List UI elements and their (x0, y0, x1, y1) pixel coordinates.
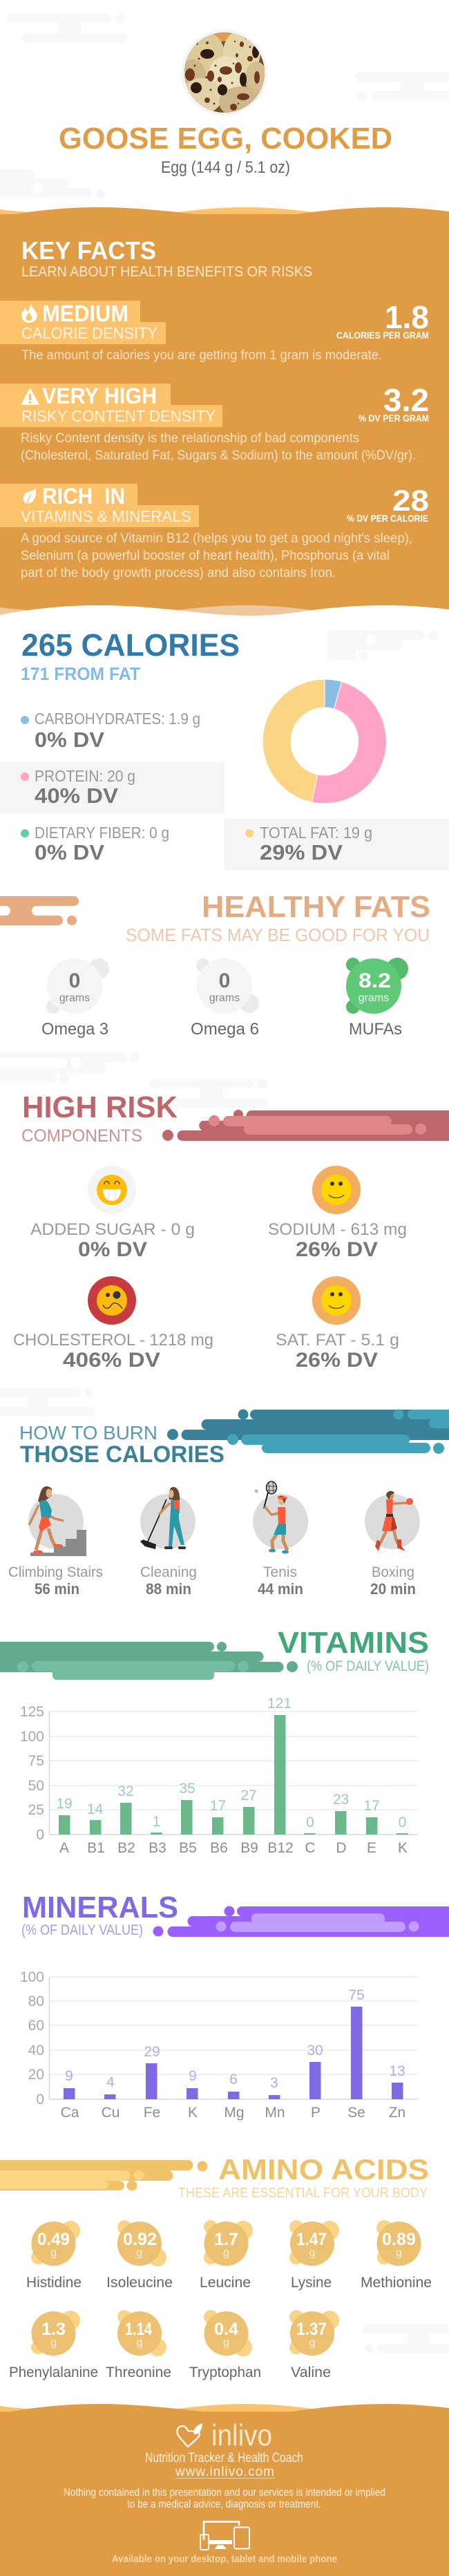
bar chart: minerals: 13 (389, 2063, 405, 2079)
heading: how to burn: HOW TO BURN (19, 1422, 157, 1443)
subheading: amino acids: THESE ARE ESSENTIAL FOR YOUR BODY (178, 2186, 428, 2201)
bar chart: vitamins: B2 (117, 1840, 135, 1856)
bar chart: minerals: 60 (28, 2018, 44, 2034)
icon: leaf (23, 489, 36, 504)
band: vitamins (0, 1642, 298, 1680)
activity: boxing (365, 1491, 420, 1598)
nutrient: carbohydrates: CARBOHYDRATES: 1.9 g (35, 710, 200, 728)
logo: inlivo: inlivo (211, 2418, 272, 2452)
amino acid: methionine: 0.89 (382, 2230, 416, 2249)
amino acid: isoleucine (106, 2220, 173, 2291)
bar chart: minerals: 80 (28, 1993, 44, 2009)
bar chart: minerals (20, 1969, 418, 2121)
card: risky content density: (Cholesterol, Saturated Fat, Sugars & Sodium) to the amount (%DV/gr). (21, 448, 416, 463)
amino acid: valine (289, 2310, 339, 2380)
amino acid: methionine (361, 2220, 432, 2291)
activity: cleaning: 88 min (146, 1580, 191, 1598)
bar chart: vitamins: 1 (153, 1814, 160, 1830)
bar chart: vitamins: 125 (20, 1704, 44, 1720)
badge: omega 3 (41, 958, 109, 1039)
card: calorie density: MEDIUM (42, 301, 128, 326)
icon: smiling face (312, 1166, 361, 1214)
card: calorie density: CALORIES PER GRAM (336, 330, 429, 341)
card: risky content density: 3.2 (383, 382, 429, 418)
heading: calories: 265 CALORIES (21, 627, 240, 663)
bar chart: vitamins: C (305, 1840, 316, 1856)
bar chart: vitamins: B12 (267, 1840, 294, 1856)
bar chart: vitamins: B1 (87, 1840, 105, 1856)
activity: tennis (253, 1481, 308, 1598)
amino acid: valine: Valine (291, 2365, 331, 2380)
subheading: healthy fats: SOME FATS MAY BE GOOD FOR YOU (126, 926, 430, 945)
bar chart: vitamins: 19 (56, 1796, 73, 1812)
risk item: sodium: 26% DV (296, 1238, 378, 1261)
risk item: sodium (268, 1166, 407, 1261)
bar chart: minerals: 0 (36, 2092, 44, 2108)
bar chart: vitamins: E (367, 1840, 376, 1856)
risk item: cholesterol: 406% DV (63, 1349, 160, 1372)
nutrient: dietary fiber: DIETARY FIBER: 0 g (35, 824, 169, 842)
risk item: cholesterol: CHOLESTEROL - 1218 mg (13, 1331, 213, 1349)
card: rich in vitamins and minerals: 28 (392, 484, 429, 518)
bar chart: minerals: K (188, 2105, 198, 2121)
amino acid: histidine: Histidine (26, 2275, 82, 2291)
bar chart: minerals: 3 (270, 2075, 278, 2091)
disclaimer (64, 2487, 385, 2510)
activity: boxing: Boxing (372, 1564, 414, 1580)
bar chart: vitamins: 50 (28, 1778, 44, 1794)
amino acid: methionine: g (396, 2247, 402, 2259)
badge: omega 6: 0 (219, 969, 230, 992)
card: rich in vitamins and minerals: A good source of Vitamin B12 (helps you to get a good night's sleep), (21, 531, 412, 546)
activity: climbing stairs (8, 1486, 103, 1598)
badge: MUFAs: grams (359, 992, 389, 1004)
card: risky content density: VERY HIGH (42, 383, 157, 408)
badge: omega 6: grams (209, 992, 240, 1004)
subheading: components: COMPONENTS (21, 1126, 142, 1146)
activity: tennis: 44 min (258, 1580, 303, 1598)
card: rich in vitamins and minerals (0, 484, 429, 580)
amino acid: phenylalanine: g (50, 2337, 57, 2349)
amino acid: isoleucine: 0.92 (123, 2230, 157, 2249)
card: risky content density: RISKY CONTENT DENSITY (21, 407, 216, 425)
amino acid: tryptophan: Tryptophan (189, 2365, 261, 2380)
band: amino acids (0, 2160, 207, 2190)
heading: vitamins: VITAMINS (278, 1626, 429, 1660)
risk item: saturated fat: SAT. FAT - 5.1 g (276, 1331, 399, 1349)
amino acid: histidine: 0.49 (37, 2230, 70, 2249)
badge: omega 6 (191, 958, 259, 1039)
card: rich in vitamins and minerals: part of the body growth process) and also contains Iron. (21, 566, 336, 580)
bar chart: vitamins: 27 (240, 1788, 257, 1803)
bar chart: vitamins: 0 (399, 1815, 406, 1830)
bar chart: minerals: 20 (28, 2067, 44, 2083)
risk item: saturated fat (276, 1276, 399, 1372)
amino acid: leucine: g (223, 2247, 229, 2259)
icon: stairs climber (29, 1486, 86, 1556)
amino acid: threonine: Threonine (106, 2365, 171, 2380)
nutrient: dietary fiber (21, 824, 169, 864)
activity: climbing stairs: 56 min (35, 1580, 79, 1598)
icon: devices (200, 2522, 249, 2550)
bar chart: minerals: 29 (144, 2044, 160, 2060)
nutrient: total fat (224, 819, 449, 870)
bar chart: vitamins: 35 (179, 1781, 195, 1797)
amino acid: tryptophan: g (223, 2337, 229, 2349)
heading: healthy fats: HEALTHY FATS (202, 890, 430, 924)
heading: amino acids: AMINO ACIDS (218, 2153, 429, 2186)
icon: grinning face (88, 1166, 136, 1214)
band: high risk (162, 1110, 449, 1141)
bar chart: minerals: 9 (189, 2068, 197, 2084)
card: calorie density (0, 299, 429, 363)
card: rich in vitamins and minerals: VITAMINS & MINERALS (21, 507, 191, 525)
bar chart: vitamins: B6 (210, 1840, 228, 1856)
amino acid: leucine (200, 2220, 253, 2291)
bar chart: minerals: 30 (307, 2043, 323, 2058)
amino acid: leucine: 1.7 (214, 2230, 238, 2249)
amino acid: lysine: g (309, 2247, 315, 2259)
website link: www.inlivo.com (175, 2465, 274, 2479)
amino acid: phenylalanine: Phenylalanine (9, 2365, 98, 2380)
panel: how to burn those calories (8, 1410, 449, 1598)
amino acid: valine: 1.37 (296, 2320, 327, 2339)
bar chart: vitamins: 0 (36, 1827, 44, 1843)
bar chart: minerals: P (311, 2105, 321, 2121)
card: calorie density: 1.8 (385, 299, 429, 335)
heading: minerals: MINERALS (22, 1891, 178, 1924)
card: rich in vitamins and minerals: RICH IN (42, 484, 125, 509)
icon: worried face (88, 1276, 136, 1325)
amino acid: isoleucine: g (137, 2247, 142, 2259)
card: calorie density: CALORIE DENSITY (21, 324, 157, 342)
card: risky content density (0, 382, 429, 463)
activity: boxing: 20 min (370, 1580, 416, 1598)
bar chart: vitamins: 0 (306, 1815, 314, 1830)
bar chart: minerals: 75 (348, 1987, 365, 2003)
panel: high risk components (13, 1090, 449, 1372)
panel: calories (0, 627, 449, 870)
bar chart: vitamins: K (398, 1840, 408, 1856)
bar chart: minerals: 40 (28, 2043, 44, 2058)
logo: inlivo (178, 2418, 272, 2452)
bar chart: vitamins: A (59, 1840, 69, 1856)
band: healthy fats (0, 896, 79, 925)
risk item: cholesterol (13, 1276, 213, 1372)
amino acid: methionine: Methionine (361, 2275, 432, 2291)
bar chart: minerals: Se (347, 2105, 365, 2121)
badge: omega 3: Omega 3 (41, 1020, 108, 1039)
card: rich in vitamins and minerals: Selenium (a powerful booster of heart health), Phosphorus (a vital (21, 549, 390, 563)
band: burn calories (167, 1410, 449, 1454)
subtitle: Egg (144 g / 5.1 oz) (161, 158, 290, 177)
bar chart: minerals: Zn (389, 2105, 405, 2121)
badge: omega 3: 0 (69, 969, 80, 992)
bar chart: minerals: Ca (61, 2105, 79, 2121)
heading: high risk: HIGH RISK (22, 1090, 178, 1124)
activity: tennis: Tenis (263, 1564, 297, 1580)
risk item: sodium: SODIUM - 613 mg (268, 1220, 407, 1239)
amino acid: valine: g (309, 2337, 315, 2349)
amino acid: tryptophan: 0.4 (214, 2320, 238, 2339)
amino acid: phenylalanine (9, 2311, 98, 2380)
icon: smiling face (312, 1276, 361, 1325)
bar chart: minerals: Mn (265, 2105, 285, 2121)
amino acid: lysine (289, 2220, 339, 2291)
icon: boxer (375, 1491, 413, 1551)
bar chart: vitamins: 75 (28, 1753, 44, 1769)
bar chart: minerals: 6 (229, 2072, 238, 2087)
nutrient: dietary fiber: 0% DV (35, 840, 104, 864)
nutrient: total fat: 29% DV (260, 840, 343, 864)
badge: omega 6: Omega 6 (191, 1020, 259, 1039)
card: risky content density: Risky Content density is the relationship of bad components (21, 431, 359, 446)
nutrient: carbohydrates: 0% DV (35, 728, 104, 752)
panel: healthy fats (0, 890, 430, 1039)
amino acid: threonine: g (137, 2337, 142, 2349)
amino acid: leucine: Leucine (200, 2275, 251, 2291)
amino acid: histidine: g (50, 2247, 57, 2259)
activity: climbing stairs: Climbing Stairs (8, 1564, 103, 1580)
card: rich in vitamins and minerals: % DV PER CALORIE (347, 513, 428, 524)
panel: minerals (20, 1891, 449, 2121)
heading: those calories: THOSE CALORIES (20, 1441, 224, 1468)
bar chart: vitamins: 100 (20, 1729, 44, 1745)
header: egg photo (178, 30, 267, 118)
subheading: key facts: LEARN ABOUT HEALTH BENEFITS OR RISKS (21, 264, 312, 280)
amino acid: isoleucine: Isoleucine (106, 2275, 173, 2291)
bar chart: vitamins: 32 (117, 1783, 134, 1799)
disclaimer: to be a medical advice, diagnosis or treatment. (127, 2499, 321, 2510)
amino acid: lysine: 1.47 (296, 2230, 327, 2249)
bar chart: minerals: Mg (224, 2105, 245, 2121)
nutrient: protein (0, 762, 224, 813)
amino acid: histidine (26, 2221, 82, 2291)
band: minerals (153, 1906, 449, 1937)
card: risky content density: % DV PER GRAM (359, 413, 429, 424)
bar chart: vitamins: 25 (28, 1802, 44, 1818)
panel: amino acids (0, 2153, 432, 2380)
bar chart: vitamins: 17 (210, 1798, 226, 1814)
subheading: minerals: (% OF DAILY VALUE) (21, 1922, 143, 1938)
bar chart: vitamins: D (336, 1840, 347, 1856)
availability note: Available on your desktop, tablet and mobile phone (112, 2553, 337, 2565)
tagline: Nutrition Tracker & Health Coach (145, 2451, 303, 2465)
icon: warning triangle (21, 388, 39, 405)
amino acid: tryptophan (189, 2310, 261, 2380)
bar chart: minerals: 100 (20, 1969, 44, 1985)
amino acid: threonine (106, 2310, 171, 2380)
activity: cleaning (140, 1487, 197, 1598)
heading: key facts: KEY FACTS (21, 236, 156, 265)
amino acid: threonine: 1.14 (125, 2320, 152, 2339)
bar chart: vitamins: B9 (240, 1840, 258, 1856)
subheading: vitamins: (% OF DAILY VALUE) (307, 1658, 429, 1674)
panel: vitamins (0, 1626, 429, 1856)
badge: MUFAs (346, 958, 408, 1039)
panel: footer (0, 2404, 449, 2576)
bar chart: minerals: Cu (102, 2105, 120, 2121)
nutrient: protein: 40% DV (35, 784, 118, 808)
badge: omega 3: grams (59, 992, 90, 1004)
icon: tennis player (254, 1481, 289, 1553)
bar chart: vitamins: 14 (87, 1801, 103, 1817)
amino acid: lysine: Lysine (291, 2275, 332, 2291)
title: GOOSE EGG, COOKED (59, 122, 392, 155)
bar chart: minerals: Fe (144, 2105, 160, 2121)
bar chart: vitamins (20, 1696, 418, 1856)
nutrient: protein: PROTEIN: 20 g (35, 767, 135, 785)
card: calorie density: The amount of calories you are getting from 1 gram is moderate. (21, 348, 382, 363)
risk item: added sugar: 0% DV (78, 1238, 147, 1261)
donut chart (262, 679, 386, 804)
risk item: added sugar: ADDED SUGAR - 0 g (30, 1220, 195, 1239)
bar chart: minerals: 4 (106, 2074, 115, 2090)
bar chart: vitamins: 17 (363, 1798, 380, 1814)
nutrient: carbohydrates (21, 710, 200, 752)
amino acid: phenylalanine: 1.3 (41, 2320, 66, 2339)
risk item: added sugar (30, 1166, 195, 1261)
activity: cleaning: Cleaning (140, 1564, 197, 1580)
icon: flame (21, 304, 37, 323)
bar chart: vitamins: B5 (179, 1840, 197, 1856)
bar chart: vitamins: 23 (333, 1792, 349, 1808)
subheading: calories from fat: 171 FROM FAT (21, 663, 140, 684)
bar chart: minerals: 9 (65, 2068, 73, 2084)
icon: person sweeping (140, 1487, 186, 1549)
badge: MUFAs: MUFAs (349, 1020, 402, 1039)
disclaimer: Nothing contained in this presentation and our services is intended or implied (64, 2487, 385, 2499)
panel: key facts (0, 207, 449, 622)
nutrient: total fat: TOTAL FAT: 19 g (260, 824, 372, 842)
bar chart: vitamins: B3 (149, 1840, 166, 1856)
risk item: saturated fat: 26% DV (296, 1349, 378, 1372)
badge: MUFAs: 8.2 (359, 969, 391, 992)
bar chart: vitamins: 121 (267, 1696, 292, 1712)
